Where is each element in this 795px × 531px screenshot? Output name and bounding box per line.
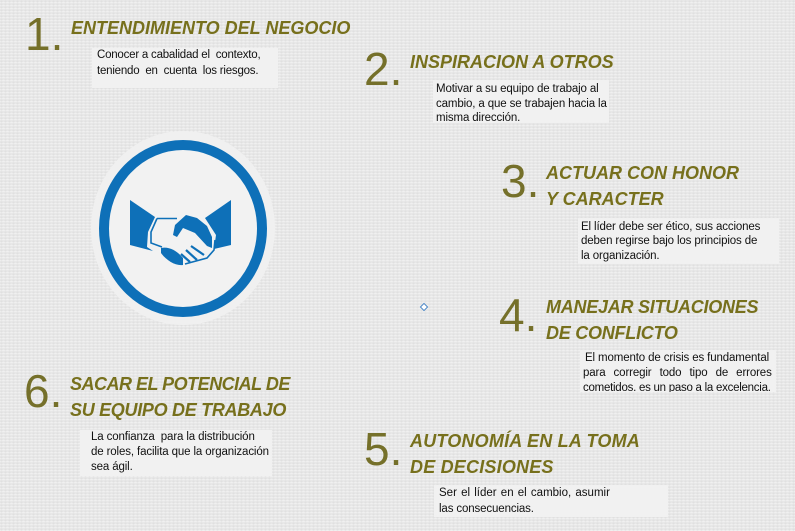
heading 1: ENTENDIMIENTO DEL NEGOCIO <box>71 18 350 38</box>
text 2: Motivar a su equipo de trabajo al <box>436 82 599 94</box>
heading 3: Y CARACTER <box>546 189 664 209</box>
text 5: las consecuencias. <box>439 503 534 515</box>
number 6: 6. <box>24 365 62 417</box>
icon: handshake in circular badge <box>92 131 274 325</box>
number 3: 3. <box>501 155 539 207</box>
heading 4: DE CONFLICTO <box>546 323 678 343</box>
text 5: Ser el líder en el cambio, asumir <box>439 487 610 499</box>
text 2 <box>433 80 609 123</box>
text 4: para corregir todo tipo de errores <box>583 367 772 379</box>
text 6: sea ágil. <box>91 461 133 473</box>
heading 5: AUTONOMÍA EN LA TOMA <box>410 431 640 451</box>
text 4 <box>580 350 776 392</box>
item 3: actuar con honor y caracter <box>501 155 779 264</box>
text 6 <box>80 430 272 476</box>
text 1 <box>92 48 278 88</box>
text 3: deben regirse bajo los principios de <box>581 235 757 247</box>
number 5: 5. <box>364 423 402 475</box>
text 5 <box>434 485 668 517</box>
item 2: inspiracion a otros <box>364 43 614 123</box>
text 1: Conocer a cabalidad el contexto, <box>97 49 260 61</box>
heading 3 <box>546 163 739 209</box>
heading 4 <box>546 297 758 343</box>
heading 2: INSPIRACION A OTROS <box>410 52 614 72</box>
number 1: 1. <box>25 8 63 60</box>
heading 6: SU EQUIPO DE TRABAJO <box>70 400 286 420</box>
heading 3: ACTUAR CON HONOR <box>546 163 739 183</box>
item 4: manejar situaciones de conflicto <box>499 289 776 392</box>
text 3: la organización. <box>581 250 659 262</box>
text 3: El líder debe ser ético, sus acciones <box>581 220 760 232</box>
text 3 <box>578 218 779 264</box>
heading 6: SACAR EL POTENCIAL DE <box>70 374 290 394</box>
text 6: de roles, facilita que la organización <box>91 446 269 458</box>
number 2: 2. <box>364 43 402 95</box>
text 4: El momento de crisis es fundamental <box>585 352 769 364</box>
heading 5: DE DECISIONES <box>410 457 554 477</box>
number 4: 4. <box>499 289 537 341</box>
item 6: sacar el potencial de su equipo de trabajo <box>24 365 291 476</box>
text 6: La confianza para la distribución <box>91 431 255 443</box>
diamond marker <box>420 303 428 311</box>
heading 4: MANEJAR SITUACIONES <box>546 297 758 317</box>
heading 5 <box>410 430 640 477</box>
item 5: autonomia en la toma de decisiones <box>364 423 668 517</box>
item 1: entendimiento del negocio <box>25 8 350 88</box>
text 1: teniendo en cuenta los riesgos. <box>97 64 258 76</box>
heading 6 <box>70 374 291 420</box>
text 2: cambio, a que se trabajen hacia la <box>436 98 607 110</box>
